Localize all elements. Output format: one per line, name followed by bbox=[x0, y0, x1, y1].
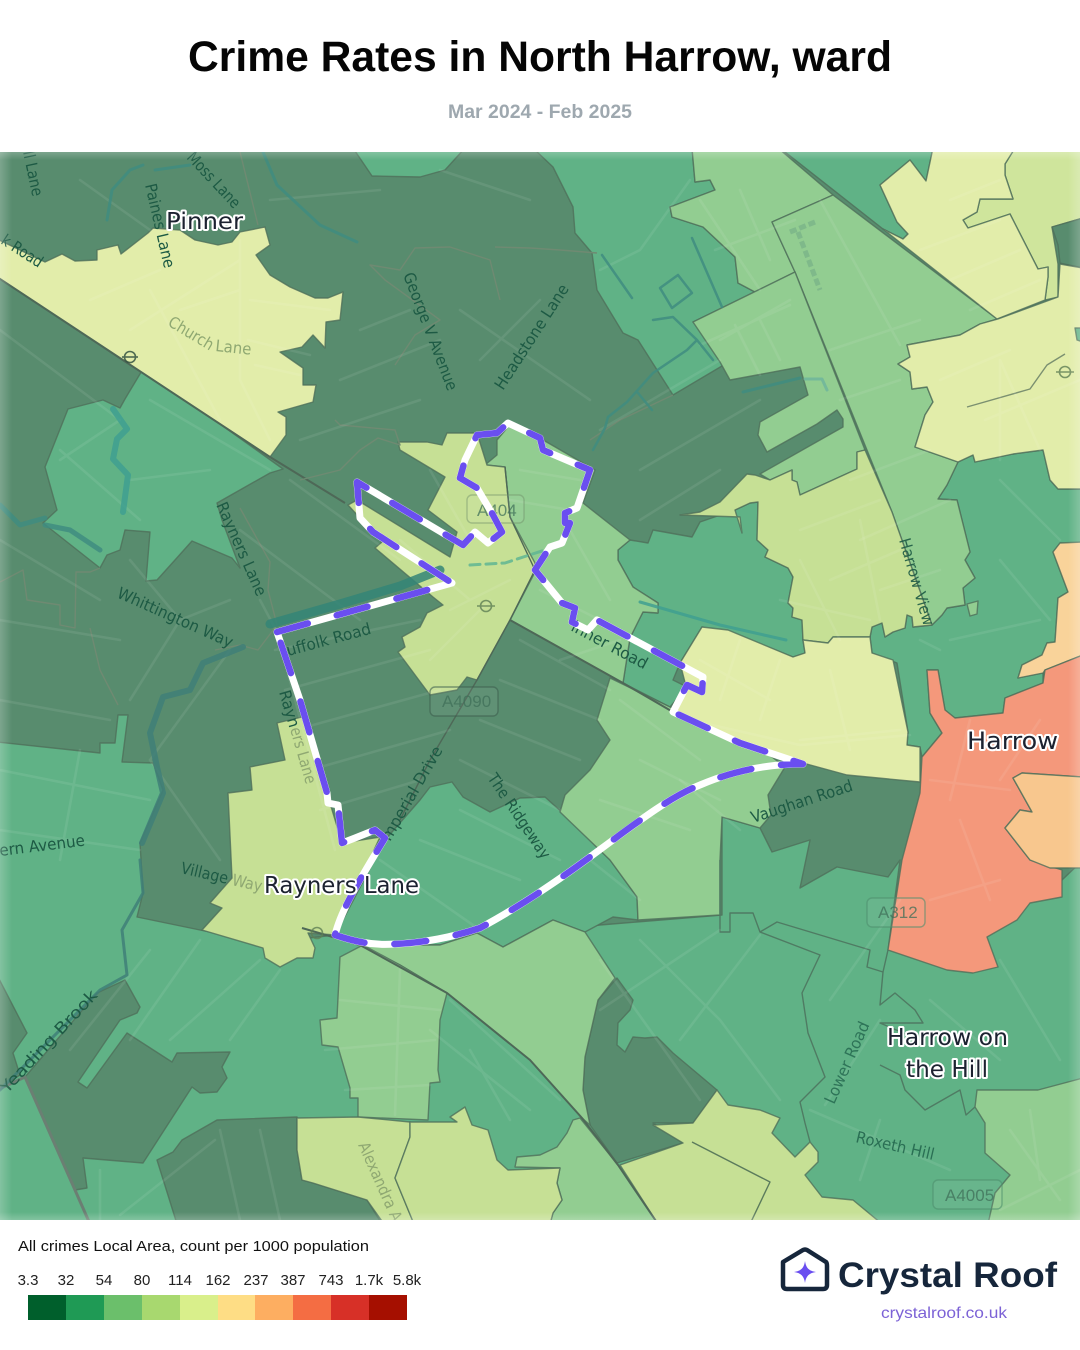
town labels: Rayners Lane bbox=[264, 873, 419, 899]
shield: A312: A312 bbox=[878, 903, 918, 922]
road labels: Church bbox=[165, 312, 218, 354]
river: Harrow bbox=[743, 378, 800, 392]
river: straight channel bbox=[692, 238, 722, 307]
road labels: Headstone Lane bbox=[490, 281, 573, 393]
road labels: ll Lane bbox=[19, 149, 47, 198]
road labels: Paines Lane bbox=[141, 182, 179, 270]
crime rate areas bbox=[0, 148, 1080, 1224]
area: top-right pale yellow bbox=[880, 148, 1048, 319]
river: Woodridings bbox=[113, 409, 128, 512]
river: Harrow lake arc bbox=[805, 379, 827, 390]
wordmark: Crystal Roof bbox=[838, 1256, 1057, 1295]
choropleth map bbox=[0, 148, 1080, 1224]
legend scale values: 743 bbox=[318, 1272, 344, 1289]
legend scale values: 5.8k bbox=[393, 1272, 422, 1289]
area: lower region medium green bbox=[0, 715, 1080, 1224]
area: small medium patch on east edge bbox=[1075, 328, 1080, 342]
area: light column bbox=[320, 945, 447, 1120]
legend scale values: 162 bbox=[205, 1272, 231, 1289]
river: north stream bbox=[602, 255, 632, 298]
river: ward west bbox=[270, 570, 440, 624]
shield: A404: A404 bbox=[477, 501, 517, 520]
area: top-right yellow-green bbox=[963, 148, 1080, 300]
town labels: Harrow bbox=[967, 727, 1058, 755]
road labels: George V Avenue bbox=[399, 270, 462, 393]
legend scale values: 54 bbox=[96, 1272, 112, 1289]
area: Harrow town centre high crime bbox=[888, 655, 1080, 973]
website link: crystalroof.co.uk bbox=[881, 1305, 1008, 1322]
area: Pinner Road pale yellow bbox=[673, 627, 920, 782]
legend bbox=[18, 1239, 422, 1320]
legend scale values: 3.3 bbox=[18, 1272, 38, 1289]
road labels: Lower Road bbox=[820, 1019, 873, 1107]
area: north-west of Rayners Lane bbox=[43, 369, 283, 581]
faint road network bbox=[0, 170, 1080, 1220]
area: light south strip bbox=[515, 1118, 658, 1224]
railway sidings bbox=[790, 222, 820, 290]
area: small light patch bbox=[967, 601, 978, 616]
river: Newton Park bbox=[640, 602, 786, 640]
river: Yeading Brook bbox=[0, 860, 143, 1090]
river: Headstone bbox=[593, 317, 713, 450]
road labels: ern Avenue bbox=[0, 831, 86, 860]
river: Yeading upper bbox=[142, 647, 243, 843]
map base: lowest crime band bbox=[0, 152, 1074, 938]
area: light inside ward north bbox=[485, 422, 658, 683]
road labels: Rayn bbox=[275, 688, 304, 730]
icon: North Harrow station bbox=[477, 600, 495, 612]
road labels: Lane bbox=[215, 336, 252, 359]
legend scale values: 80 bbox=[134, 1272, 150, 1289]
area: south yellow-green east bbox=[620, 1090, 882, 1224]
legend scale values: 114 bbox=[168, 1272, 192, 1289]
area: light south-east of ward bbox=[560, 678, 785, 920]
area: low band Yeading bbox=[25, 980, 230, 1190]
shield: A4090 bbox=[430, 687, 498, 716]
road shields bbox=[430, 495, 1002, 1209]
road labels: inner Road bbox=[568, 617, 651, 673]
shield: A312 bbox=[867, 898, 925, 927]
area: south yellow-green west bbox=[297, 1117, 414, 1224]
legend scale values bbox=[18, 1272, 422, 1289]
road labels: Harrow View bbox=[895, 536, 938, 628]
river: central bbox=[470, 545, 560, 565]
area: central east medium bbox=[618, 502, 805, 707]
area: far-right low band bbox=[1052, 218, 1080, 268]
area: central east yellow-green bbox=[680, 450, 932, 643]
road labels: Whittington Way bbox=[114, 583, 236, 651]
area: low band south centre bbox=[583, 978, 717, 1163]
town labels: the Hill bbox=[906, 1057, 988, 1083]
area: top north small bbox=[355, 152, 462, 178]
area: Harrow peach bbox=[1005, 773, 1080, 868]
town labels: Pinner bbox=[166, 209, 244, 235]
area: light green Headstone bbox=[670, 148, 833, 292]
road labels bbox=[0, 148, 938, 1224]
water features bbox=[0, 152, 827, 1090]
area: low band far left strip bbox=[0, 975, 27, 1090]
internal area outlines bbox=[0, 152, 1065, 1224]
area: light north of railway bbox=[693, 272, 865, 495]
area: wedge north-east bbox=[780, 148, 933, 239]
shield: A404 bbox=[467, 495, 524, 523]
road labels: Moss Lane bbox=[183, 148, 245, 212]
area: Pinner pale yellow bbox=[0, 227, 343, 457]
area: light south-east corner bbox=[975, 1078, 1080, 1224]
road labels: Roxeth Hill bbox=[854, 1127, 936, 1164]
icon: house with star bbox=[783, 1250, 827, 1289]
icon: Rayners Lane station bbox=[312, 928, 322, 938]
area: light south centre bbox=[360, 920, 615, 1125]
road labels: Vaughan Road bbox=[748, 776, 855, 827]
area: inside ward south bbox=[335, 782, 638, 947]
logo: Crystal Roof bbox=[783, 1250, 1057, 1322]
area: east pale yellow bbox=[898, 264, 1080, 489]
icon: Harrow station bbox=[1056, 366, 1074, 378]
road labels: Village Way bbox=[179, 858, 264, 896]
river: left bend bbox=[0, 505, 100, 550]
legend scale values: 32 bbox=[58, 1272, 74, 1289]
title: Crime Rates in North Harrow, ward bbox=[188, 33, 892, 81]
area: Rayners Lane bbox=[202, 717, 380, 967]
town labels: Harrow on bbox=[887, 1025, 1008, 1051]
area: south yellow-green middle bbox=[395, 1107, 562, 1224]
area: North Harrow centre bbox=[348, 433, 535, 695]
legend title: All crimes Local Area, count per 1000 population bbox=[18, 1239, 369, 1255]
river: top bbox=[263, 152, 357, 242]
shield: A4005 bbox=[933, 1180, 1002, 1209]
shield: A4005: A4005 bbox=[945, 1186, 994, 1205]
North Harrow ward boundary bbox=[277, 423, 803, 944]
legend scale values: 387 bbox=[280, 1272, 306, 1289]
legend scale values: 1.7k bbox=[355, 1272, 384, 1289]
road labels: ers Lane bbox=[286, 725, 320, 786]
area: large light wedge bbox=[772, 195, 997, 625]
road labels: uffolk Road bbox=[284, 619, 373, 660]
icon: Pinner station bbox=[122, 352, 138, 362]
area: low band south-west bbox=[157, 1117, 382, 1224]
road labels: Rayners Lane bbox=[212, 499, 271, 599]
legend colour bar bbox=[28, 1295, 407, 1320]
area: top-right peach bbox=[1018, 542, 1080, 678]
tube icons bbox=[122, 352, 1074, 938]
road labels: mperial Drive bbox=[377, 743, 446, 844]
area: east side Harrow bbox=[870, 450, 1080, 757]
legend scale values: 237 bbox=[243, 1272, 269, 1289]
road labels: The Ridgeway bbox=[483, 769, 555, 862]
river: moat bbox=[660, 275, 692, 308]
river: Pinner west bbox=[107, 165, 190, 220]
shield: A4090: A4090 bbox=[442, 692, 491, 711]
road labels: Alexandra A bbox=[354, 1139, 406, 1224]
town labels bbox=[166, 209, 1058, 1083]
subtitle: date range: Mar 2024 - Feb 2025 bbox=[448, 102, 632, 123]
area: Headstone north bbox=[533, 148, 755, 395]
